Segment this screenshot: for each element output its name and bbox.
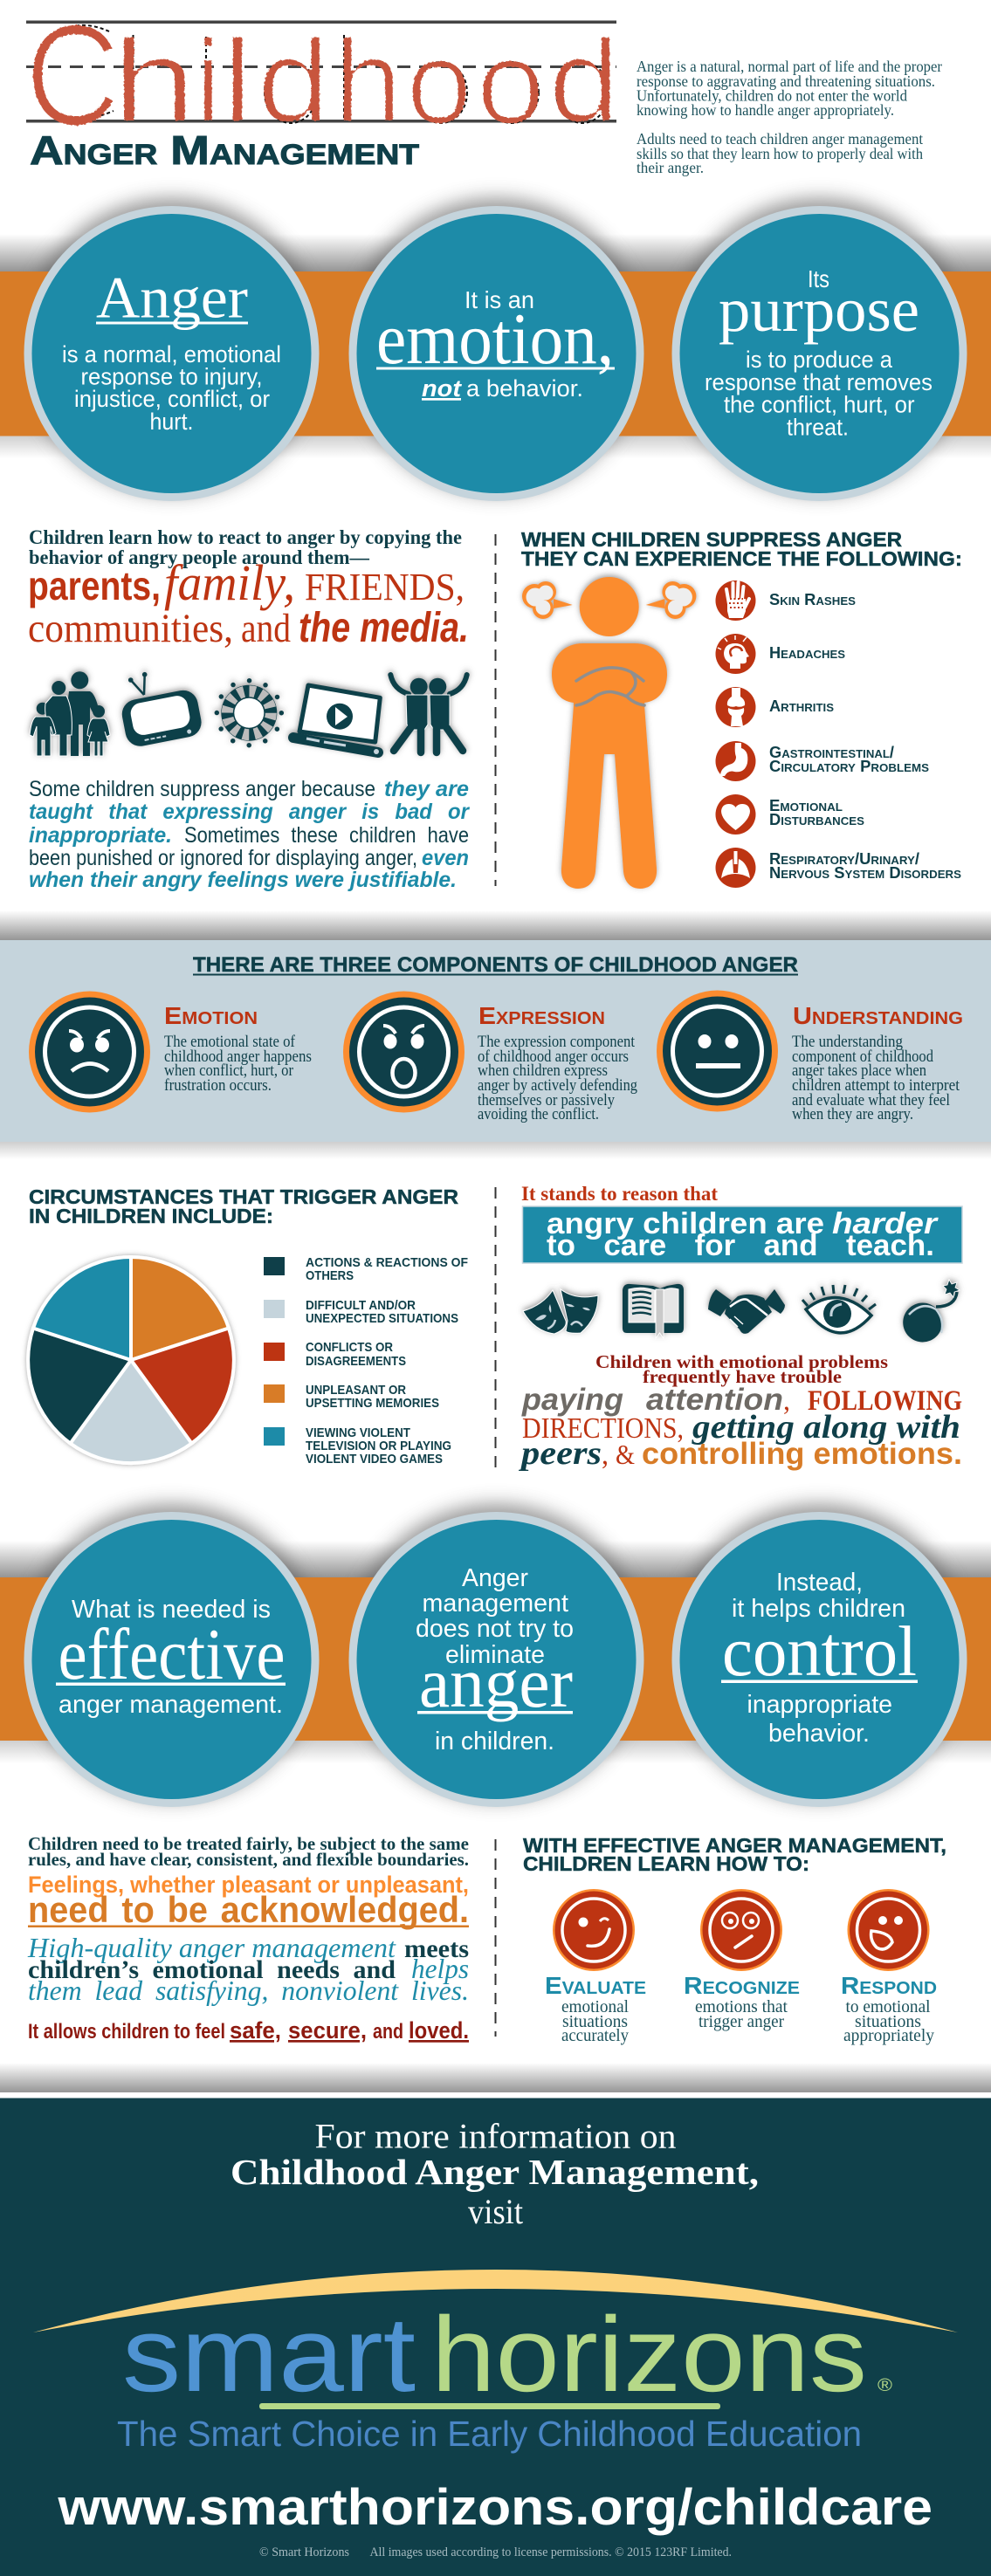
text block: some children suppress: taught that expressing anger is bad or bbox=[29, 800, 470, 824]
panel: top orange band with circles bbox=[0, 198, 991, 501]
intro text bbox=[637, 58, 942, 176]
heading: circumstances: CIRCUMSTANCES THAT TRIGGER ANGER bbox=[29, 1185, 458, 1208]
legend: CONFLICTS OR bbox=[306, 1340, 393, 1355]
circle: control: it helps children bbox=[732, 1595, 905, 1623]
legend: DIFFICULT AND/OR bbox=[306, 1298, 416, 1313]
circle: purpose: the conflict, hurt, or bbox=[724, 391, 915, 417]
icon: two people cheering bbox=[390, 675, 467, 752]
description bbox=[843, 1997, 934, 2045]
heading: when children suppress anger bbox=[521, 528, 962, 570]
subtitle: Anger Management: Anger Management bbox=[30, 127, 420, 173]
text: emotional problems bbox=[595, 1351, 888, 1387]
title: Childhood: l bbox=[222, 17, 253, 147]
text block: some children suppress: when their angry feelings were justifiable. bbox=[29, 868, 457, 892]
icon: arthritis joint bbox=[716, 687, 756, 727]
description: situations bbox=[855, 2012, 921, 2031]
legend bbox=[264, 1255, 468, 1467]
text: trouble list: peers bbox=[519, 1435, 602, 1472]
text block: children need: need to be acknowledged. bbox=[28, 1889, 469, 1930]
text block: some children suppress: Sometimes these children have bbox=[184, 823, 469, 848]
text block: children learn: the media. bbox=[299, 605, 469, 651]
icon: angry face bbox=[29, 992, 150, 1112]
title: Childhood: h bbox=[334, 17, 403, 147]
legend: UPSETTING MEMORIES bbox=[306, 1396, 439, 1411]
text block: some children suppress: even bbox=[422, 846, 469, 870]
text: trouble list: DIRECTIONS, bbox=[522, 1412, 684, 1445]
text: expression: anger by actively defending bbox=[478, 1077, 637, 1095]
circle: purpose: purpose bbox=[719, 275, 919, 345]
icon: glasses face bbox=[700, 1889, 782, 1971]
text: trouble list: , bbox=[783, 1385, 790, 1417]
description: emotions that bbox=[695, 1997, 788, 2016]
heading: with effective anger management: CHILDREN LEARN HOW TO: bbox=[523, 1852, 809, 1875]
description: trigger anger bbox=[699, 2012, 784, 2031]
circle: Anger: response to injury, bbox=[80, 363, 262, 389]
circle: Anger: Anger bbox=[96, 264, 248, 330]
icons: trouble row bbox=[523, 1280, 960, 1343]
description bbox=[695, 1997, 788, 2031]
text block: children learn: family, bbox=[164, 554, 295, 611]
icon: bomb bbox=[903, 1280, 960, 1343]
heading: when children suppress anger: WHEN CHILDREN SUPPRESS ANGER bbox=[521, 528, 902, 551]
circle: Anger: hurt. bbox=[150, 409, 194, 435]
intro text: response to aggravating and threatening situations. bbox=[637, 72, 935, 90]
description: to emotional bbox=[845, 1997, 931, 2016]
circle: emotion bbox=[349, 206, 644, 501]
circle: purpose: threat. bbox=[787, 414, 849, 440]
label: Headaches bbox=[769, 644, 845, 662]
icon: stomach bbox=[716, 741, 756, 781]
text: expression: avoiding the conflict. bbox=[478, 1106, 599, 1123]
text: emotion: frustration occurs. bbox=[164, 1077, 272, 1095]
list: symptoms bbox=[716, 580, 961, 888]
text: website url: www.smarthorizons.org/childcare bbox=[57, 2479, 933, 2536]
text: trouble list: getting along with bbox=[692, 1409, 960, 1446]
circle: purpose: Its bbox=[808, 265, 829, 292]
text: emotional problems: Children with emotional problems bbox=[595, 1351, 888, 1372]
text block: children need: High-quality anger management bbox=[27, 1932, 396, 1963]
label: Emotional bbox=[769, 797, 843, 814]
panel: second orange band with circles bbox=[0, 1504, 991, 1807]
circle: control: inappropriate bbox=[747, 1691, 892, 1719]
callout: angry children are harder: angry children are bbox=[547, 1207, 824, 1240]
circle: control bbox=[672, 1512, 967, 1807]
circle: control: behavior. bbox=[768, 1720, 870, 1748]
text block: children learn bbox=[28, 526, 469, 651]
legend: VIEWING VIOLENT bbox=[306, 1425, 410, 1440]
intro text: Anger is a natural, normal part of life and the proper bbox=[637, 58, 942, 75]
text: it stands to reason: It stands to reason that bbox=[521, 1183, 718, 1205]
text: trouble list: & bbox=[616, 1439, 635, 1470]
heading: with effective anger management bbox=[523, 1834, 946, 1875]
text block: children learn: communities, bbox=[28, 606, 233, 651]
text: emotion: The emotional state of bbox=[164, 1034, 296, 1051]
text: understanding: anger takes place when bbox=[792, 1062, 926, 1080]
heading: with effective anger management: WITH EFFECTIVE ANGER MANAGEMENT, bbox=[523, 1834, 946, 1857]
text: trouble list: paying bbox=[521, 1383, 623, 1417]
pie chart bbox=[28, 1257, 234, 1463]
icon: winking face bbox=[553, 1889, 635, 1971]
description: appropriately bbox=[843, 2026, 934, 2045]
heading: circumstances bbox=[29, 1185, 458, 1227]
text block: children learn: Children learn how to react to anger by copying the bbox=[29, 526, 462, 548]
icon: lungs bbox=[716, 848, 756, 888]
label: Arthritis bbox=[769, 697, 834, 715]
callout: angry children are harder: to care for and teach. bbox=[547, 1229, 934, 1262]
text: emotional problems: frequently have trouble bbox=[643, 1366, 842, 1387]
description: emotional bbox=[561, 1997, 629, 2016]
panel: three components bbox=[0, 910, 991, 1159]
text: understanding: Understanding bbox=[793, 1002, 963, 1029]
legend: VIOLENT VIDEO GAMES bbox=[306, 1452, 443, 1467]
text: for more information bbox=[231, 2116, 759, 2231]
text block: children need: secure, bbox=[288, 2017, 367, 2044]
icon: headache head bbox=[716, 634, 756, 674]
logo: smart horizons: horizons bbox=[431, 2295, 867, 2414]
title: Childhood: o bbox=[477, 18, 545, 148]
text block: children need: Children need to be treated fairly, be subject to the same bbox=[28, 1833, 469, 1854]
text: expression: when children express bbox=[478, 1062, 608, 1080]
circle: effective: anger management. bbox=[58, 1691, 283, 1719]
text: understanding bbox=[792, 1002, 963, 1123]
text block: some children suppress: Some children suppress anger because bbox=[29, 777, 375, 801]
legend: UNPLEASANT OR bbox=[306, 1383, 406, 1398]
text: expression: themselves or passively bbox=[478, 1092, 616, 1109]
legend: TELEVISION OR PLAYING bbox=[306, 1439, 451, 1453]
intro text: skills so that they learn how to properly deal with bbox=[637, 145, 923, 162]
legend: ACTIONS & REACTIONS OF bbox=[306, 1255, 468, 1270]
title: Childhood bbox=[24, 0, 620, 155]
circle: effective bbox=[24, 1512, 320, 1807]
circle: purpose: is to produce a bbox=[746, 347, 892, 373]
text block: children need bbox=[27, 1833, 469, 2044]
title: Childhood: d bbox=[548, 17, 620, 147]
text block: some children suppress: been punished or ignored for displaying anger, bbox=[29, 846, 417, 870]
text: understanding: The understanding bbox=[792, 1034, 903, 1051]
text block: children need: children’s emotional needs and bbox=[28, 1955, 396, 1984]
text: understanding: and evaluate what they feel bbox=[792, 1092, 950, 1109]
text block: some children suppress bbox=[29, 777, 470, 892]
text: trouble list: attention bbox=[646, 1383, 783, 1417]
text: trouble list bbox=[519, 1383, 962, 1472]
text: emotion: when conflict, hurt, or bbox=[164, 1062, 293, 1080]
text: expression bbox=[478, 1002, 637, 1123]
circle: Anger: is a normal, emotional bbox=[62, 341, 281, 368]
label: Respond bbox=[841, 1972, 937, 1999]
icon: laughing face bbox=[847, 1889, 929, 1971]
circle: anger: management bbox=[423, 1590, 568, 1618]
label: Nervous System Disorders bbox=[769, 864, 961, 882]
logo: smart horizons: ® bbox=[877, 2376, 892, 2395]
divider bbox=[494, 534, 496, 886]
label: Gastrointestinal/ bbox=[769, 744, 894, 761]
logo: smart horizons bbox=[33, 2270, 958, 2454]
label bbox=[769, 797, 864, 828]
circle: effective: What is needed is bbox=[72, 1596, 271, 1624]
text: trouble list: FOLLOWING bbox=[808, 1385, 962, 1417]
text: for more information: visit bbox=[468, 2192, 523, 2231]
description bbox=[561, 1997, 629, 2045]
icon: steam puffs bbox=[522, 581, 696, 619]
icon: open book bbox=[623, 1284, 684, 1338]
circle: Anger bbox=[24, 206, 320, 501]
intro text: Unfortunately, children do not enter the world bbox=[637, 87, 907, 105]
label: Evaluate bbox=[545, 1972, 646, 1999]
icon: handshake bbox=[708, 1289, 785, 1334]
circle: emotion: emotion, bbox=[376, 299, 614, 380]
text block: children need: and bbox=[373, 2020, 403, 2044]
text block: some children suppress: inappropriate. bbox=[29, 823, 172, 848]
description: situations bbox=[562, 2012, 628, 2031]
text: expression: of childhood anger occurs bbox=[478, 1048, 629, 1066]
text: for more information: For more information on bbox=[314, 2116, 676, 2156]
text block: children need: safe, bbox=[230, 2017, 281, 2044]
text: expression: Expression bbox=[478, 1002, 605, 1029]
text block: children learn: FRIENDS, bbox=[305, 566, 465, 608]
logo: smart horizons: The Smart Choice in Early Childhood Education bbox=[117, 2414, 862, 2454]
circle: control: control bbox=[722, 1611, 917, 1691]
icon: eye bbox=[802, 1285, 876, 1333]
circle: anger: does not try to bbox=[416, 1615, 574, 1643]
text block: children learn: parents, bbox=[28, 563, 161, 608]
label: Disturbances bbox=[769, 811, 864, 828]
label: Skin Rashes bbox=[769, 591, 856, 608]
column: evaluate bbox=[545, 1889, 646, 2045]
icons: people and media bbox=[30, 671, 467, 756]
text block: children need: helps bbox=[411, 1953, 469, 1984]
callout: angry children are harder: harder bbox=[832, 1207, 939, 1240]
text: understanding: component of childhood bbox=[792, 1048, 934, 1066]
circle: emotion: a behavior. bbox=[466, 375, 583, 402]
text block: children need: rules, and have clear, consistent, and flexible boundaries. bbox=[28, 1849, 469, 1870]
text: copyright: © Smart Horizons bbox=[259, 2545, 349, 2559]
icon: laptop video bbox=[293, 685, 380, 754]
icon: family bbox=[30, 671, 110, 756]
icon: television bbox=[120, 672, 204, 749]
circle: control: Instead, bbox=[776, 1569, 863, 1597]
text: understanding: when they are angry. bbox=[792, 1106, 913, 1123]
logo: smart horizons: smart bbox=[122, 2295, 416, 2414]
footer panel bbox=[0, 2063, 991, 2576]
column: recognize bbox=[684, 1889, 800, 2031]
label bbox=[769, 744, 929, 775]
heading: THERE ARE THREE COMPONENTS OF CHILDHOOD ANGER bbox=[193, 953, 798, 977]
intro text: Adults need to teach children anger management bbox=[637, 130, 923, 148]
column: respond bbox=[841, 1889, 937, 2045]
circle: emotion: not bbox=[422, 375, 462, 402]
divider bbox=[494, 1839, 496, 2037]
text block: children need: them lead satisfying, nonviolent lives. bbox=[28, 1975, 469, 2006]
label: Recognize bbox=[684, 1972, 800, 1999]
text: understanding: children attempt to interpret bbox=[792, 1077, 960, 1095]
circle: anger: eliminate bbox=[445, 1641, 545, 1669]
label bbox=[769, 850, 961, 882]
text block: children need: It allows children to feel bbox=[28, 2020, 225, 2044]
title: Childhood: d bbox=[257, 17, 330, 147]
icon: neutral face bbox=[657, 990, 778, 1112]
icon: shouting face bbox=[343, 992, 465, 1112]
text: copyright: All images used according to license permissions. © 2015 123RF Limited. bbox=[370, 2545, 732, 2559]
legend: OTHERS bbox=[306, 1268, 354, 1283]
text block: some children suppress: they are bbox=[384, 777, 469, 801]
heading: when children suppress anger: THEY CAN EXPERIENCE THE FOLLOWING: bbox=[521, 547, 962, 570]
circle: anger: Anger bbox=[462, 1564, 528, 1592]
text: for more information: Childhood Anger Management, bbox=[231, 2152, 759, 2192]
text: trouble list: , bbox=[602, 1439, 609, 1471]
text: emotion bbox=[164, 1002, 312, 1095]
text block: children learn: and bbox=[241, 606, 291, 651]
intro text: knowing how to handle anger appropriately. bbox=[637, 101, 894, 119]
icon: community mandala bbox=[217, 681, 281, 745]
text block: children need: Feelings, whether pleasant or unpleasant, bbox=[28, 1872, 469, 1898]
description: accurately bbox=[561, 2026, 629, 2045]
text block: children need: meets bbox=[404, 1934, 469, 1963]
text: emotion: childhood anger happens bbox=[164, 1048, 312, 1066]
title: Childhood: h bbox=[112, 17, 196, 147]
text: trouble list: controlling emotions. bbox=[642, 1437, 962, 1471]
circle: anger bbox=[349, 1512, 644, 1807]
text: emotion: Emotion bbox=[164, 1002, 258, 1029]
legend: UNEXPECTED SITUATIONS bbox=[306, 1311, 458, 1326]
icon: theatre masks bbox=[523, 1289, 598, 1334]
title: Childhood: i bbox=[195, 17, 222, 147]
heading: circumstances: IN CHILDREN INCLUDE: bbox=[29, 1205, 273, 1227]
circle: emotion: It is an bbox=[465, 286, 534, 313]
circle: Anger: injustice, conflict, or bbox=[74, 386, 270, 412]
label: Circulatory Problems bbox=[769, 758, 929, 775]
figure: orange angry person bbox=[522, 577, 696, 889]
circle: anger: anger bbox=[419, 1643, 573, 1722]
icon: heart bbox=[716, 794, 756, 835]
text block: children learn: behavior of angry people around them— bbox=[29, 546, 370, 568]
label: Respiratory/Urinary/ bbox=[769, 850, 919, 868]
callout: angry children are harder bbox=[522, 1206, 962, 1263]
circle: purpose bbox=[672, 206, 967, 501]
icon: skin rashes hand bbox=[716, 580, 756, 621]
text: expression: The expression component bbox=[478, 1034, 636, 1051]
circle: anger: in children. bbox=[435, 1728, 554, 1755]
divider bbox=[494, 1187, 496, 1473]
intro text: their anger. bbox=[637, 159, 704, 176]
circle: effective: effective bbox=[58, 1614, 285, 1695]
text block: children need: loved. bbox=[409, 2017, 469, 2044]
legend: DISAGREEMENTS bbox=[306, 1354, 406, 1369]
circle: purpose: response that removes bbox=[705, 369, 933, 395]
title: Childhood: o bbox=[406, 18, 472, 148]
